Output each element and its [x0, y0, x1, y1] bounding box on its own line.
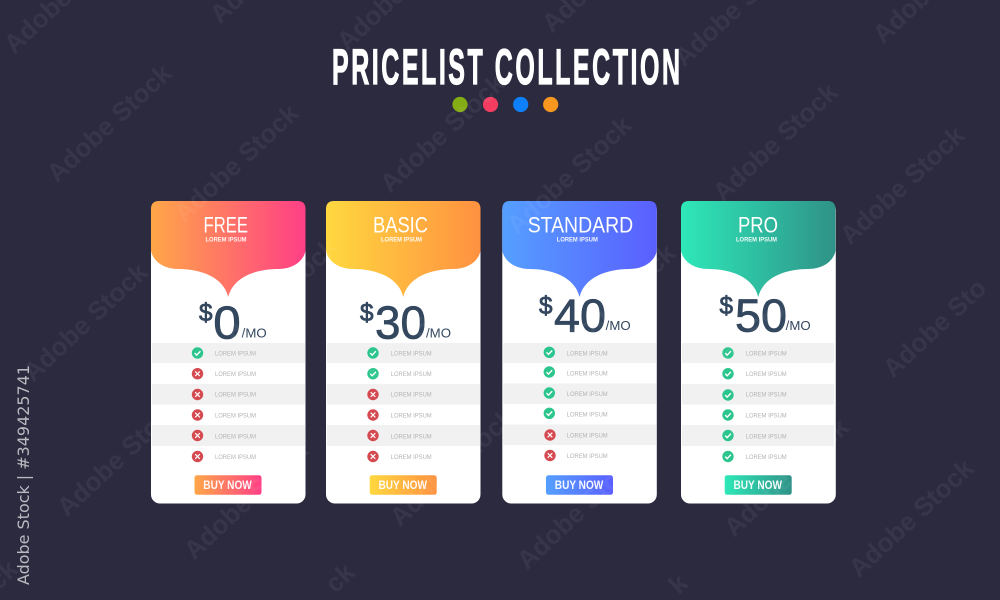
- STANDARD price: [539, 290, 631, 342]
- BASIC buy button: [370, 475, 437, 495]
- title: PRICELIST COLLECTION: [332, 40, 680, 95]
- FREE feature rows: LOREM IPSUM: [215, 392, 256, 399]
- PRO header shape: [681, 201, 836, 297]
- BASIC price: $: [360, 299, 374, 327]
- PRO buy button: [725, 475, 792, 495]
- PRO feature rows: LOREM IPSUM: [746, 412, 787, 419]
- watermark pattern: Adobe Stock: [51, 391, 188, 522]
- STANDARD feature rows: LOREM IPSUM: [567, 432, 608, 439]
- STANDARD buy button: [546, 475, 613, 495]
- BASIC buy button: BUY NOW: [378, 480, 427, 492]
- STANDARD feature rows: [503, 343, 656, 461]
- BASIC feature rows: LOREM IPSUM: [391, 392, 432, 399]
- watermark pattern: Adobe Stock: [17, 256, 154, 387]
- watermark pattern: Adobe Stock: [707, 76, 844, 207]
- BASIC price: /MO: [426, 326, 451, 341]
- panel: BASIC plan: [326, 201, 480, 504]
- STANDARD feature rows: LOREM IPSUM: [567, 453, 608, 460]
- BASIC heading: BASIC: [373, 213, 428, 238]
- PRO price: /MO: [786, 318, 811, 333]
- BASIC feature rows: LOREM IPSUM: [391, 412, 432, 419]
- STANDARD subheading: LOREM IPSUM: [557, 237, 598, 244]
- watermark pattern: Adobe Stock: [843, 452, 980, 583]
- STANDARD feature rows: LOREM IPSUM: [567, 412, 608, 419]
- FREE feature rows: LOREM IPSUM: [215, 433, 256, 440]
- STANDARD header shape: [502, 201, 657, 297]
- watermark pattern: Adobe Sto: [877, 273, 992, 383]
- PRO price: 50: [735, 290, 787, 342]
- side stock credit: Adobe Stock | #349425741: [14, 365, 33, 585]
- PRO feature rows: LOREM IPSUM: [746, 433, 787, 440]
- STANDARD feature rows: LOREM IPSUM: [567, 391, 608, 398]
- watermark pattern: Adobe Stock: [340, 272, 477, 403]
- watermark pattern: Adobe Stock: [374, 67, 511, 198]
- FREE feature rows: LOREM IPSUM: [215, 371, 256, 378]
- PRO price: $: [720, 292, 733, 320]
- watermark pattern: Adobe Stock: [384, 401, 521, 532]
- STANDARD price: $: [539, 292, 553, 320]
- watermark pattern: Adobe Stock: [511, 444, 648, 575]
- FREE heading: FREE: [204, 213, 248, 238]
- watermark pattern: Adobe Stock: [207, 231, 344, 362]
- watermark pattern: Adobe Stock: [834, 119, 971, 250]
- PRO price: [720, 290, 811, 342]
- STANDARD feature rows: LOREM IPSUM: [567, 350, 608, 357]
- PRO feature rows: LOREM IPSUM: [746, 454, 787, 461]
- FREE price: 0: [213, 296, 241, 348]
- PRO feature rows: LOREM IPSUM: [746, 392, 787, 399]
- watermark pattern: Adobe Stock: [501, 109, 638, 240]
- PRO feature rows: LOREM IPSUM: [746, 371, 787, 378]
- FREE feature rows: LOREM IPSUM: [215, 412, 256, 419]
- FREE buy button: BUY NOW: [203, 480, 252, 492]
- PRO buy button: BUY NOW: [734, 480, 782, 492]
- PRO feature rows: [682, 343, 834, 462]
- BASIC header shape: [326, 201, 480, 297]
- STANDARD price: 40: [554, 290, 606, 342]
- BASIC feature rows: [327, 343, 480, 462]
- FREE feature rows: [152, 343, 305, 462]
- BASIC price: 30: [375, 296, 426, 348]
- FREE feature rows: LOREM IPSUM: [215, 454, 256, 461]
- PRO subheading: LOREM IPSUM: [736, 237, 777, 244]
- BASIC feature rows: LOREM IPSUM: [391, 350, 432, 357]
- panel: PRO plan: [681, 201, 836, 504]
- panel: FREE plan: [151, 201, 306, 504]
- watermark pattern: Adobe Stock: [676, 274, 813, 405]
- STANDARD feature rows: LOREM IPSUM: [567, 371, 608, 378]
- STANDARD buy button: BUY NOW: [555, 480, 603, 492]
- watermark pattern: Adobe Stock: [41, 57, 178, 188]
- colored dots: [452, 97, 558, 112]
- watermark pattern: Adobe Stock: [545, 237, 682, 368]
- PRO heading: PRO: [738, 213, 778, 238]
- panel: STANDARD plan: [502, 201, 657, 504]
- FREE subheading: LOREM IPSUM: [206, 237, 247, 244]
- FREE buy button: [194, 475, 262, 495]
- FREE price: /MO: [242, 326, 267, 341]
- FREE feature rows: LOREM IPSUM: [215, 350, 256, 357]
- watermark pattern: k: [662, 567, 694, 600]
- watermark pattern: Adobe Stock: [178, 434, 315, 565]
- FREE price: $: [199, 299, 213, 327]
- watermark pattern: ck: [319, 556, 361, 598]
- FREE price: [199, 296, 267, 348]
- watermark pattern: Adobe Stock: [718, 411, 855, 542]
- BASIC feature rows: LOREM IPSUM: [391, 371, 432, 378]
- BASIC feature rows: LOREM IPSUM: [391, 433, 432, 440]
- BASIC price: [360, 296, 451, 348]
- BASIC subheading: LOREM IPSUM: [381, 237, 422, 244]
- BASIC feature rows: LOREM IPSUM: [391, 454, 432, 461]
- STANDARD heading: STANDARD: [528, 213, 633, 238]
- STANDARD price: /MO: [606, 318, 631, 333]
- FREE header shape: [151, 201, 306, 297]
- PRO feature rows: LOREM IPSUM: [746, 350, 787, 357]
- watermark pattern: Adobe Stock: [168, 97, 305, 228]
